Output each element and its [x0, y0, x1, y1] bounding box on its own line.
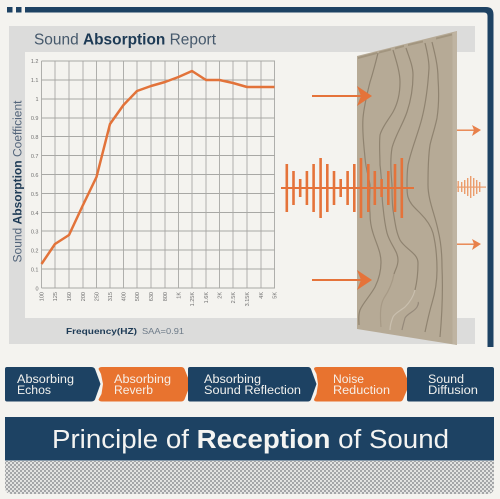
frequency label: Frequency(HZ) [66, 326, 137, 336]
panel face [357, 31, 457, 345]
step: Absorbing Sound Reflection: Sound Reflection [204, 385, 301, 397]
arrow: outgoing top [457, 125, 481, 136]
sound wave: incoming [281, 158, 414, 218]
x axis labels: 160 [67, 292, 73, 301]
x axis labels: 315 [108, 292, 114, 301]
y axis labels: 0.2 [31, 248, 38, 254]
step: Sound Diffusion [407, 367, 494, 402]
step: Absorbing Reverb [98, 367, 190, 402]
y axis labels: 0.9 [31, 116, 38, 122]
y axis labels: 1.2 [31, 59, 38, 65]
x axis labels: 2K [218, 292, 224, 299]
step: Sound Diffusion: Diffusion [428, 385, 478, 397]
hatched footer [5, 461, 494, 494]
x axis labels: 400 [122, 292, 128, 301]
step: Absorbing Reverb: Reverb [114, 385, 153, 397]
y axis labels: 0.1 [31, 268, 38, 274]
step: Noise Reduction [314, 367, 410, 402]
sound wave: transmitted [457, 176, 486, 198]
y axis labels: 0.7 [31, 154, 38, 160]
x axis labels: 1.25K [190, 292, 196, 306]
y axis labels: 0.3 [31, 230, 38, 236]
step: Absorbing Echos: Absorbing [17, 374, 74, 386]
x axis labels: 2.5K [231, 292, 237, 303]
x axis labels: 200 [81, 292, 87, 301]
x axis labels: 250 [94, 292, 100, 301]
panel background [9, 26, 475, 344]
absorption curve [42, 71, 274, 264]
y axis labels [31, 59, 38, 292]
acoustic panel [357, 31, 457, 345]
panel grooves [359, 42, 442, 337]
step: Absorbing Reverb: Absorbing [114, 374, 171, 386]
x axis labels: 500 [135, 292, 141, 301]
panel: report [9, 26, 475, 344]
x axis labels: 5K [272, 292, 278, 299]
x axis labels: 1K [176, 292, 182, 299]
x axis labels: 100 [40, 292, 46, 301]
y axis labels: 0.8 [31, 135, 38, 141]
y axis labels: 1.1 [31, 78, 38, 84]
report title: Sound Absorption Report [34, 32, 217, 48]
x axis labels: 630 [149, 292, 155, 301]
step: Noise Reduction: Reduction [333, 385, 390, 397]
step: Absorbing Sound Reflection: Absorbing [204, 374, 261, 386]
x axis labels: 125 [53, 292, 59, 301]
x axis labels: 1.6K [204, 292, 210, 303]
x axis labels: 4K [259, 292, 265, 299]
arrow: outgoing bottom [457, 239, 481, 250]
step: Absorbing Echos: Echos [17, 385, 51, 397]
step: Absorbing Sound Reflection [188, 367, 316, 402]
arrow: incoming top [312, 86, 372, 106]
SAA value: SAA=0.91 [142, 326, 184, 336]
y axis labels: 0.4 [31, 211, 38, 217]
x axis labels: 800 [163, 292, 169, 301]
arrow: incoming bottom [312, 270, 372, 290]
main title: Principle of Reception of Sound [52, 426, 449, 454]
step: Noise Reduction: Noise [333, 374, 364, 386]
top bar [7, 7, 494, 347]
y axis title: Sound Absorption Coefficient [12, 100, 24, 262]
line chart [31, 59, 278, 306]
step: Absorbing Echos [5, 367, 100, 402]
step: Sound Diffusion: Sound [428, 374, 464, 386]
y axis labels: 0 [35, 286, 38, 292]
y axis labels: 0.5 [31, 192, 38, 198]
y axis labels: 0.6 [31, 173, 38, 179]
y axis labels: 1 [35, 97, 38, 103]
x axis labels [40, 292, 278, 306]
title band [5, 417, 494, 460]
x axis labels: 3.15K [245, 292, 251, 306]
